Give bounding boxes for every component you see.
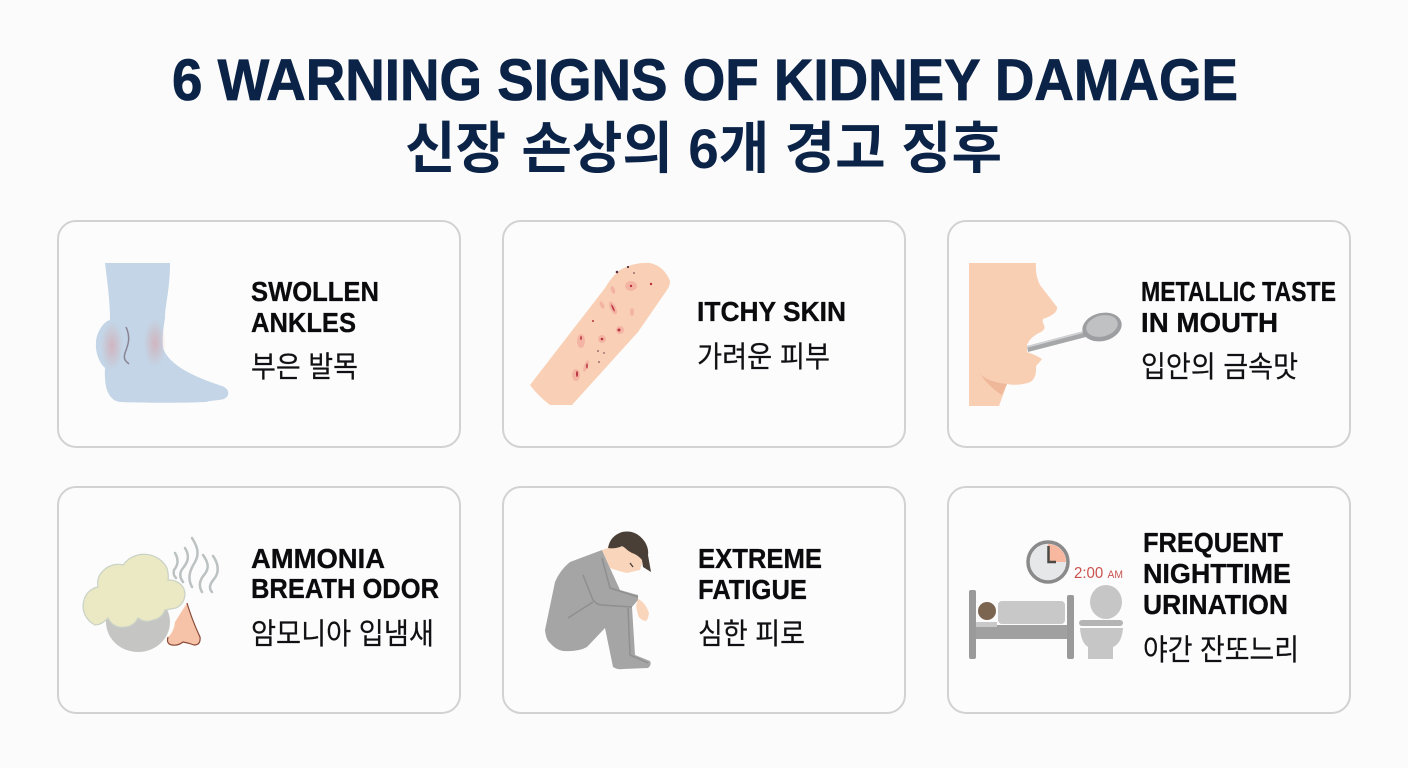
text: nighttime urination: URINATION [1143,589,1288,620]
panel: metallic taste [948,221,1350,447]
panel: itchy skin [503,221,905,447]
text: metallic taste: METALLIC TASTE [1141,276,1336,307]
text: metallic taste: 입안의 금속맛 [1141,351,1298,384]
title: 신장 손상의 6개 경고 징후 [405,117,1002,180]
panel: ammonia breath [58,487,460,713]
title [172,48,1238,180]
text: itchy skin: 가려운 피부 [697,341,830,374]
text: metallic taste [1141,276,1336,384]
text: ammonia breath: 암모니아 입냄새 [251,618,434,651]
panel: swollen ankles [58,221,460,447]
clock [1028,542,1068,582]
time label: 2:00 AM [1074,565,1123,582]
text: swollen ankles [251,276,379,384]
text: nighttime urination: NIGHTTIME [1143,558,1291,589]
text: swollen ankles: SWOLLEN [251,276,379,307]
text: extreme fatigue: EXTREME [698,543,822,574]
title: 6 WARNING SIGNS OF KIDNEY DAMAGE [172,48,1238,113]
icon: face with spoon [969,263,1125,406]
text: itchy skin: ITCHY SKIN [697,296,846,327]
text: metallic taste: IN MOUTH [1141,307,1278,338]
text: extreme fatigue: FATIGUE [698,574,807,605]
text: extreme fatigue [698,543,822,651]
text: extreme fatigue: 심한 피로 [698,618,805,651]
text: nighttime urination: FREQUENT [1143,527,1283,558]
panel: nighttime urination [948,487,1350,713]
text: itchy skin [697,296,846,374]
icon: arm with rash [530,263,670,405]
text: nighttime urination [1143,527,1299,667]
text: swollen ankles: ANKLES [251,307,356,338]
text: swollen ankles: 부은 발목 [251,351,358,384]
icon: tired seated person [545,531,651,669]
panel: extreme fatigue [503,487,905,713]
toilet [1079,585,1123,659]
icon: breath cloud and nose [83,538,218,652]
icon: clock, bed and toilet [969,542,1123,659]
icon: swollen foot [96,263,228,403]
text: ammonia breath: AMMONIA [251,543,385,574]
bed [969,590,1074,659]
text: ammonia breath [251,543,439,651]
text: ammonia breath: BREATH ODOR [251,573,439,604]
text: nighttime urination: 야간 잔또느리 [1143,634,1299,667]
